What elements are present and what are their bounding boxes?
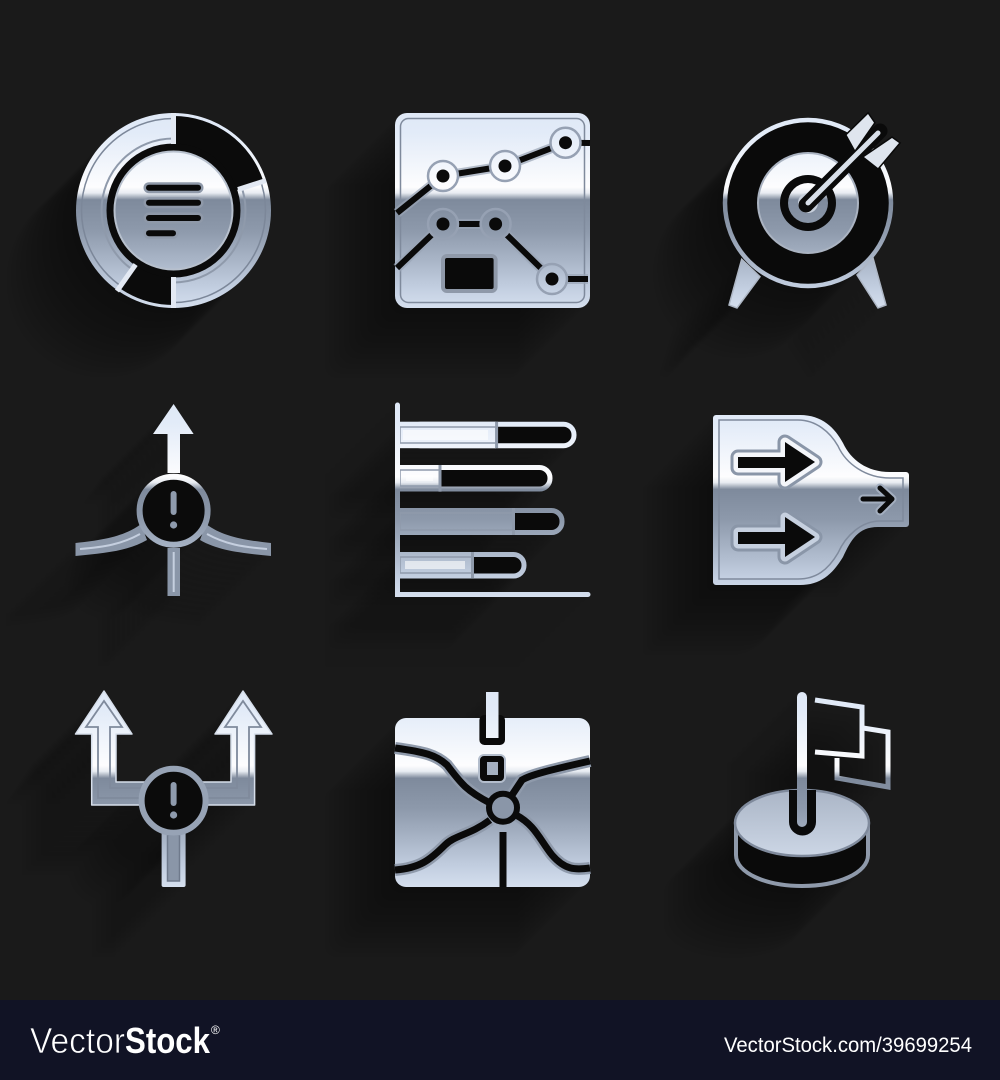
footer band <box>0 1000 1000 1080</box>
logo: VectorStock: ® <box>211 1023 220 1037</box>
icon: donut chart with text lines <box>76 113 271 308</box>
icon: map with routes <box>395 692 590 887</box>
icon: bottleneck with arrows <box>713 415 909 585</box>
icon: line chart panel <box>395 113 590 308</box>
image id URL text: VectorStock.com/39699254 <box>724 1034 972 1057</box>
logo: VectorStock: Stock <box>125 1020 211 1061</box>
logo: VectorStock: Vector <box>30 1020 125 1061</box>
icon: flag on round base <box>734 692 888 888</box>
icon: road junction with up arrow <box>76 404 271 596</box>
icon: split arrows with alert <box>76 691 272 887</box>
icon: horizontal bar chart <box>395 402 590 597</box>
icon: target with arrow <box>723 114 899 308</box>
